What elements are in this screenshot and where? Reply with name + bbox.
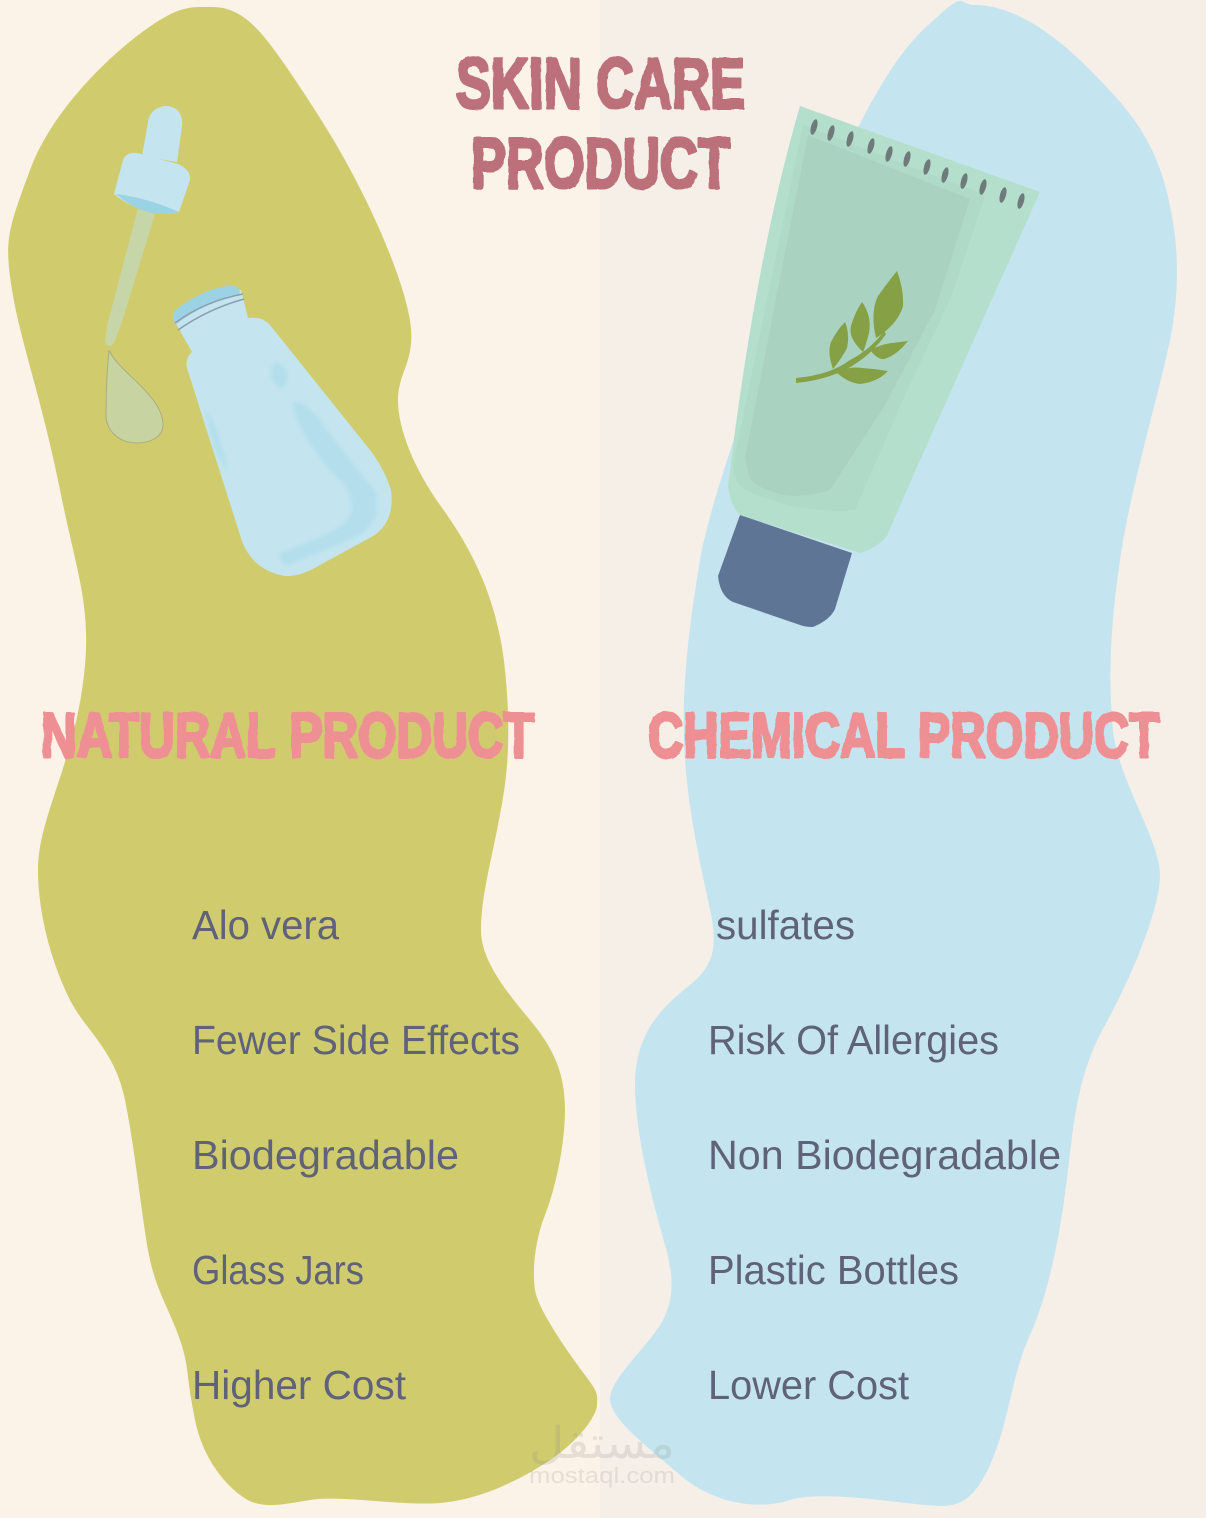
- text: glass jars: Glass Jars: [192, 1247, 364, 1293]
- bottle opening: [173, 286, 240, 325]
- text: higher cost: Higher Cost: [192, 1362, 407, 1408]
- tube cap: [718, 515, 852, 627]
- dropper glass tube: [105, 208, 155, 346]
- watermark: mostaql.com: [529, 1463, 675, 1488]
- icon: dropper: [105, 106, 190, 346]
- text: biodegradable: Biodegradable: [192, 1132, 459, 1178]
- title: PRODUCT: [471, 125, 730, 204]
- watermark: [529, 1418, 675, 1488]
- dropper collar: [114, 153, 190, 213]
- dropper collar opening: [116, 194, 179, 214]
- heading: natural product: NATURAL PRODUCT: [41, 701, 534, 771]
- text: plastic bottles: Plastic Bottles: [708, 1247, 959, 1293]
- title: [456, 45, 745, 204]
- text: lower cost: Lower Cost: [708, 1362, 910, 1408]
- tube crimp stitches: [809, 118, 1026, 210]
- dropper rubber bulb: [142, 106, 182, 162]
- bottle body: [175, 290, 392, 576]
- text: risk of allergies: Risk Of Allergies: [708, 1017, 999, 1063]
- bottle neck threads: [175, 294, 244, 330]
- text: fewer side effects: Fewer Side Effects: [192, 1017, 520, 1063]
- tube label area: [745, 135, 970, 496]
- tube shade: [733, 125, 985, 511]
- list: natural product traits: [192, 902, 520, 1408]
- watermark: مستقل: [529, 1418, 675, 1469]
- text: non biodegradable: Non Biodegradable: [708, 1132, 1061, 1178]
- list: chemical product traits: [708, 902, 1061, 1408]
- icon: oil drop: [106, 350, 163, 443]
- bottle highlight streaks: [205, 360, 377, 565]
- icon: cream tube: [718, 106, 1040, 627]
- text: sulfates: sulfates: [716, 902, 855, 948]
- panel: chemical product blob: [610, 1, 1177, 1506]
- icon: green leaf sprig: [796, 271, 908, 384]
- panel: natural product blob: [8, 7, 597, 1505]
- title: SKIN CARE: [456, 45, 745, 124]
- text: alo vera: Alo vera: [192, 902, 339, 948]
- tube body: [728, 106, 1040, 553]
- icon: glass bottle: [173, 286, 392, 576]
